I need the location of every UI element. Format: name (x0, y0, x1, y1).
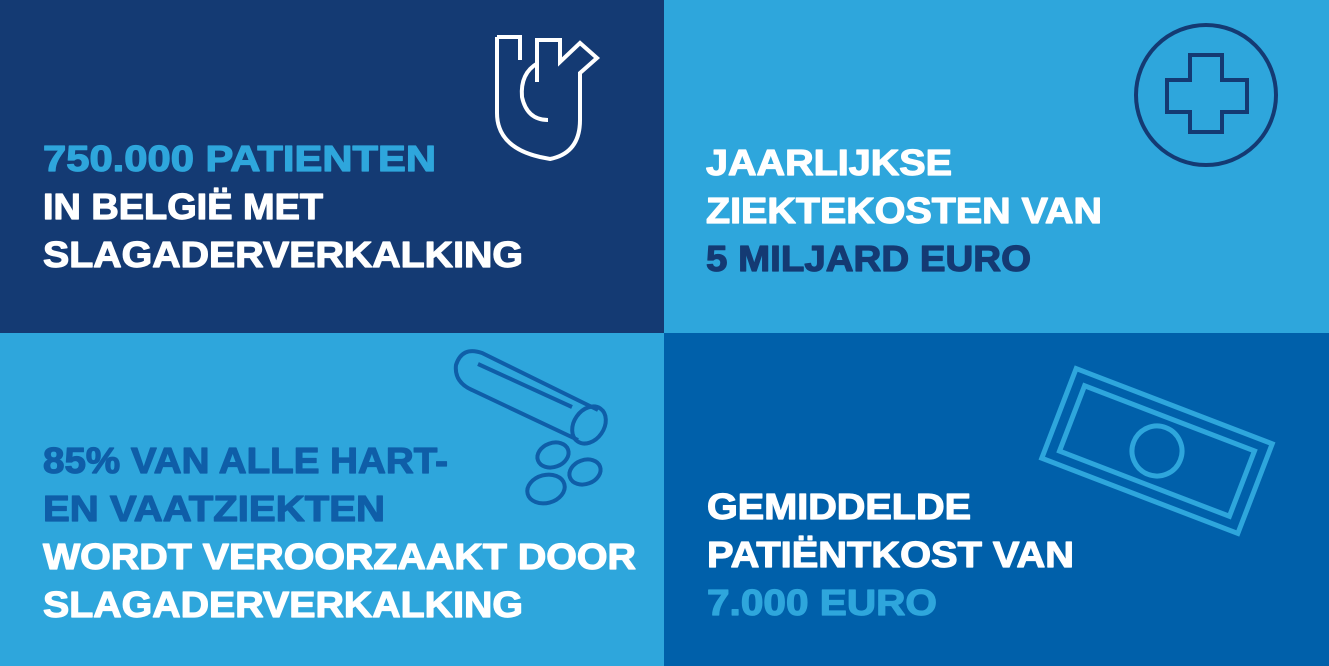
text: patients (43, 138, 523, 275)
icon: artery and blood cells (456, 351, 613, 507)
panel: costs (664, 0, 1329, 333)
panel: cardiovascular (0, 333, 664, 666)
text: costs: 5 MILJARD EURO (706, 238, 1031, 279)
icon: heart (497, 37, 597, 159)
icon: banknote (1042, 369, 1272, 533)
text: patient cost: 7.000 EURO (707, 582, 937, 623)
icon: medical cross (1136, 25, 1276, 165)
text: patients: 750.000 PATIENTEN (43, 138, 436, 179)
text: cardiovascular: EN VAATZIEKTEN (43, 488, 385, 529)
text: cardiovascular: SLAGADERVERKALKING (43, 584, 523, 625)
text: costs: JAARLIJKSE (706, 142, 952, 183)
text: cardiovascular: 85% VAN ALLE HART- (43, 440, 448, 481)
text: costs: ZIEKTEKOSTEN VAN (706, 190, 1102, 231)
text: costs (706, 142, 1102, 279)
panel: patients (0, 0, 664, 333)
text: patients: IN BELGIË MET (43, 186, 323, 227)
text: patient cost: PATIËNTKOST VAN (707, 534, 1074, 575)
text: cardiovascular (43, 440, 636, 625)
text: patients: SLAGADERVERKALKING (43, 234, 523, 275)
text: cardiovascular: WORDT VEROORZAAKT DOOR (43, 536, 636, 577)
text: patient cost: GEMIDDELDE (707, 486, 971, 527)
text: patient cost (707, 486, 1074, 623)
panel: patient cost (664, 333, 1329, 666)
